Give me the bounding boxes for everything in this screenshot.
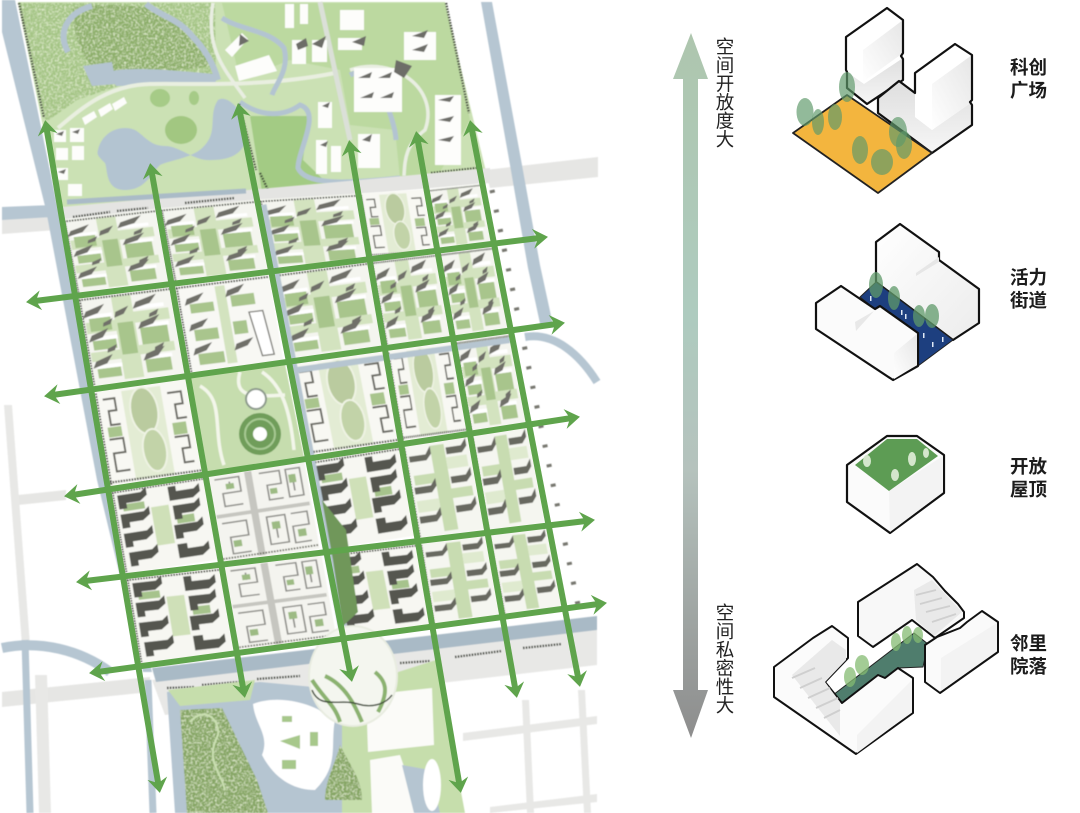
court ground [833, 633, 928, 703]
axis label: greater openness: 空间开放度大 [714, 37, 735, 148]
south canal, road and tree rows [152, 616, 597, 715]
right stepped building [878, 44, 972, 153]
city blocks grid [62, 183, 578, 664]
back tall building [846, 8, 903, 104]
arrow: east-west corridor 1 [31, 238, 543, 302]
arrow: north-south corridor 6 [471, 125, 579, 682]
diagram: open roof [847, 436, 944, 533]
plaza ground [793, 95, 932, 193]
label: open roof: 开放 屋顶 [1010, 456, 1047, 500]
diagram: innovation plaza [793, 8, 972, 193]
arrow: north-south corridor 1 [46, 125, 159, 788]
large building [876, 224, 979, 340]
roof garden [855, 439, 938, 491]
diagram: vibrant street [816, 224, 979, 380]
block row 3 [93, 333, 526, 487]
label: vibrant street: 活力 街道 [1010, 267, 1047, 311]
label: innovation plaza: 科创 广场 [1010, 57, 1047, 101]
arrow: north-south corridor 3 [239, 108, 351, 677]
plaza trees [796, 72, 912, 175]
courtyard trees [844, 626, 923, 687]
arrow: east-west corridor 3 [69, 418, 575, 496]
north park [18, 2, 488, 212]
block row 4 [110, 427, 544, 574]
navy street [860, 282, 953, 366]
spatial openness axis arrow [673, 33, 708, 738]
south park [167, 660, 465, 813]
arrow: east-west corridor 4 [81, 520, 590, 582]
site plan map [2, 0, 602, 813]
circular park [309, 626, 397, 726]
central water channel and green corridor [262, 190, 578, 640]
arrow: north-south corridor 4 [350, 145, 460, 788]
street trees [869, 272, 939, 328]
outer roads and water context [2, 0, 598, 813]
arrow: north-south corridor 2 [151, 168, 244, 693]
diagram: neighbourhood courtyard [774, 564, 998, 754]
arrow: east-west corridor 5 [94, 604, 602, 672]
east-west road below north park [60, 168, 490, 220]
green corridor arrows [31, 108, 602, 788]
front left block with stairs [774, 626, 913, 754]
block row 1 [62, 183, 492, 294]
axis label: greater privacy: 空间私密性大 [714, 603, 735, 714]
block row 2 [77, 246, 509, 387]
front building [816, 286, 918, 380]
right block [925, 611, 998, 693]
arrow: north-south corridor 5 [417, 136, 516, 693]
block row 5 [125, 528, 563, 664]
street pedestrians [870, 296, 944, 347]
arrow: east-west corridor 2 [49, 324, 560, 396]
central park block [190, 364, 304, 472]
back block with stairs [858, 564, 964, 647]
building volume [847, 436, 944, 533]
label: neighbourhood courtyard: 邻里 院落 [1010, 633, 1047, 677]
